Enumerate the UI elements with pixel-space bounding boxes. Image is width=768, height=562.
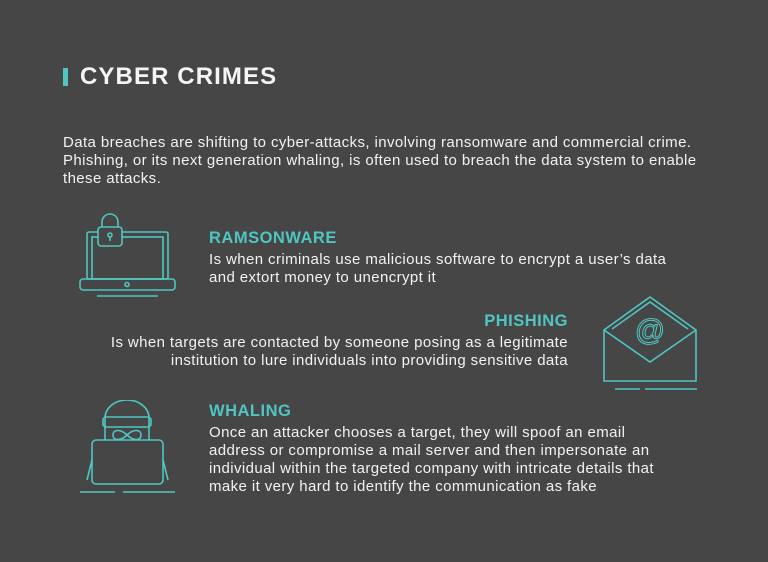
phishing block: PHISHING bbox=[484, 312, 568, 330]
icon: envelope bbox=[603, 296, 697, 390]
intro text: Data breaches are shifting to cyber-attacks, involving ransomware and commercial crime. Phishing, or its next generation whaling, is often used to breach the data system to enable these attacks. bbox=[63, 134, 696, 187]
ransomware block bbox=[209, 229, 666, 286]
phishing block: Is when targets are contacted by someone posing as a legitimate institution to lure individuals into providing sensitive data bbox=[111, 334, 568, 369]
phishing block bbox=[111, 312, 568, 369]
icon: laptop with lock bbox=[79, 213, 176, 297]
title: CYBER CRIMES bbox=[80, 63, 277, 90]
whaling block: WHALING bbox=[209, 402, 291, 420]
icon: hacker bbox=[80, 400, 175, 493]
ransomware block: Is when criminals use malicious software to encrypt a user’s data and extort money to unencrypt it bbox=[209, 251, 666, 286]
ransomware block: RAMSONWARE bbox=[209, 229, 337, 247]
whaling block: Once an attacker chooses a target, they will spoof an email address or compromise a mail server and then impersonate an individual within the targeted company with intricate details that make it very hard to identify the communication as fake bbox=[209, 424, 654, 495]
icon: envelope: @ bbox=[635, 314, 665, 347]
